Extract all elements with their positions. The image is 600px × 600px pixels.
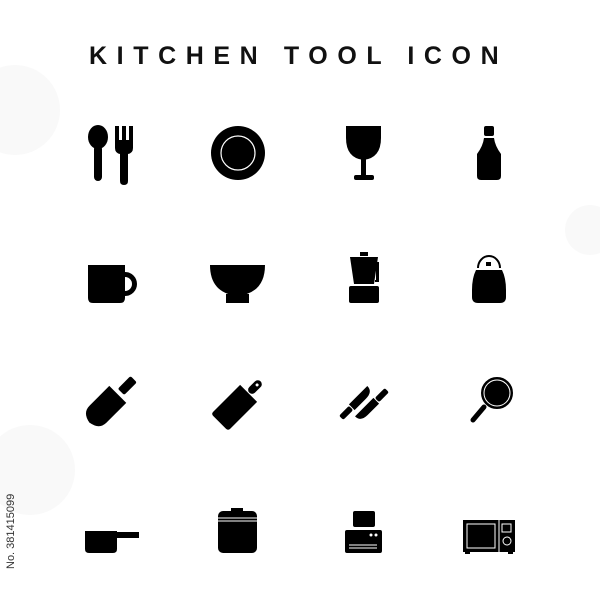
icon: cleaver: [81, 370, 142, 431]
icon: toaster: [345, 511, 382, 553]
icon: frying pan: [473, 380, 510, 420]
icon: microwave: [463, 520, 515, 554]
icon: knives: [338, 386, 390, 422]
icon: bowl: [210, 265, 265, 303]
side id text: No. 381415099: [5, 494, 17, 569]
icon: wine glass: [346, 126, 381, 180]
icon: pot: [218, 508, 257, 553]
icon: spoon and fork: [88, 125, 133, 185]
icon: cutting board: [211, 373, 269, 431]
icon: bottle: [477, 126, 501, 180]
icon: saucepan: [85, 531, 139, 553]
icon: mug: [88, 265, 137, 303]
icon: plate: [211, 126, 265, 180]
icon: kettle: [472, 256, 506, 303]
title: KITCHEN TOOL ICON: [89, 42, 508, 70]
icon: blender: [349, 252, 379, 303]
